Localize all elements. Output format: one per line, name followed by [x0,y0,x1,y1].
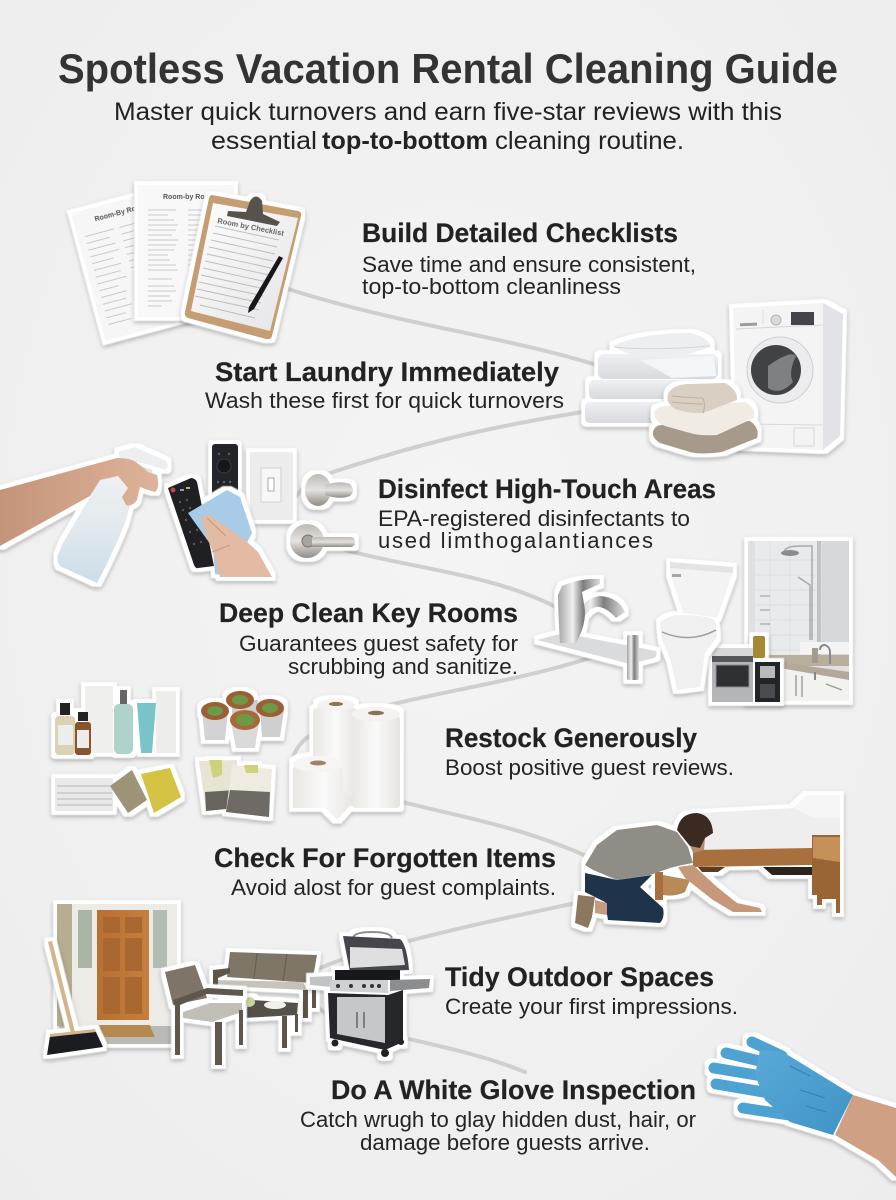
clipboard [185,195,301,339]
heading: Build Detailed Checklists [362,218,678,248]
step 1: build detailed checklists [71,185,696,341]
description: Avoid alost for guest complaints. [231,875,556,900]
illustration: front door, patio set and grill [47,904,430,1065]
description: used limthogalantiances [378,528,653,553]
title block [58,45,838,155]
toilet [660,562,733,690]
step 4: deep clean key rooms [219,541,849,702]
description: Create your first impressions. [445,994,738,1019]
title: Spotless Vacation Rental Cleaning Guide [58,45,838,92]
door knob [305,474,353,506]
step 2: start laundry immediately [205,303,843,454]
illustration: toiletries, coffee, tea and paper rolls [55,686,400,820]
paper checklist left [71,190,194,341]
illustration: linens and washing machine [585,303,843,454]
description: scrubbing and sanitize. [288,654,518,679]
step 8: do a white glove inspection [300,1042,896,1177]
heading: Restock Generously [445,723,697,753]
broom [47,941,103,1055]
coffee pods [201,691,284,748]
illustration: faucet, toilet, bathroom and kitchen [537,541,849,702]
step 6: check for forgotten items [214,795,840,928]
heading: Check For Forgotten Items [214,843,556,873]
stove, brass bottle and coffee maker [712,636,780,702]
description: Guarantees guest safety for [239,631,518,656]
tv remote tall [212,444,238,506]
folded cloths and sponges [55,768,181,813]
description: Boost positive guest reviews. [445,755,734,780]
illustration: blue gloved hand [714,1042,896,1177]
paper towel rolls [293,699,400,820]
folded towels [653,383,758,454]
bed [655,795,840,913]
description: top-to-bottom cleanliness [362,274,621,299]
sofa [213,952,317,1018]
hand with spray bottle [0,447,168,583]
subtitle: Master quick turnovers and earn five-star reviews with this [114,98,782,126]
clipboard: Room by Checklist [217,216,285,238]
bathroom photo [748,541,849,701]
tea bags [199,760,272,817]
tv remote with cloth and hand [168,478,272,577]
connector lines between steps [285,288,600,1072]
heading: Deep Clean Key Rooms [219,598,518,628]
description: EPA-registered disinfectants to [378,506,690,531]
step 7: tidy outdoor spaces [47,904,738,1065]
description: Wash these first for quick turnovers [205,388,564,413]
folded linens [585,333,718,423]
paper checklist middle [138,185,234,317]
illustration: spray, remotes, switch and door handles [0,444,355,583]
description: damage before guests arrive. [360,1130,650,1155]
description: Save time and ensure consistent, [362,252,696,277]
subtitle: cleaning routine. [495,127,684,155]
light switch [250,452,293,520]
paper checklist middle: Room-by Room Cli [163,194,226,201]
subtitle: top-to-bottom [322,127,488,155]
description: Catch wrugh to glay hidden dust, hair, or [300,1107,696,1132]
faucet with deck plate [537,579,657,680]
person [575,813,762,928]
heading: Do A White Glove Inspection [331,1075,696,1105]
heading: Tidy Outdoor Spaces [445,962,714,992]
gas grill [310,932,430,1057]
front door photo [57,904,177,1044]
step 5: restock generously [55,686,734,820]
subtitle: essential [211,127,317,155]
coffee table [243,997,298,1048]
illustration: checklists and clipboard [71,185,301,341]
heading: Disinfect High-Touch Areas [378,474,716,504]
patio chair [165,965,243,1065]
heading: Start Laundry Immediately [215,357,559,387]
illustration: person checking under bed [575,795,840,928]
door lever [290,524,355,558]
washing machine [733,303,843,450]
toiletry bottles [55,686,176,755]
step 3: disinfect high-touch areas [0,444,716,583]
paper checklist left: Room-By Room Che [94,199,162,223]
